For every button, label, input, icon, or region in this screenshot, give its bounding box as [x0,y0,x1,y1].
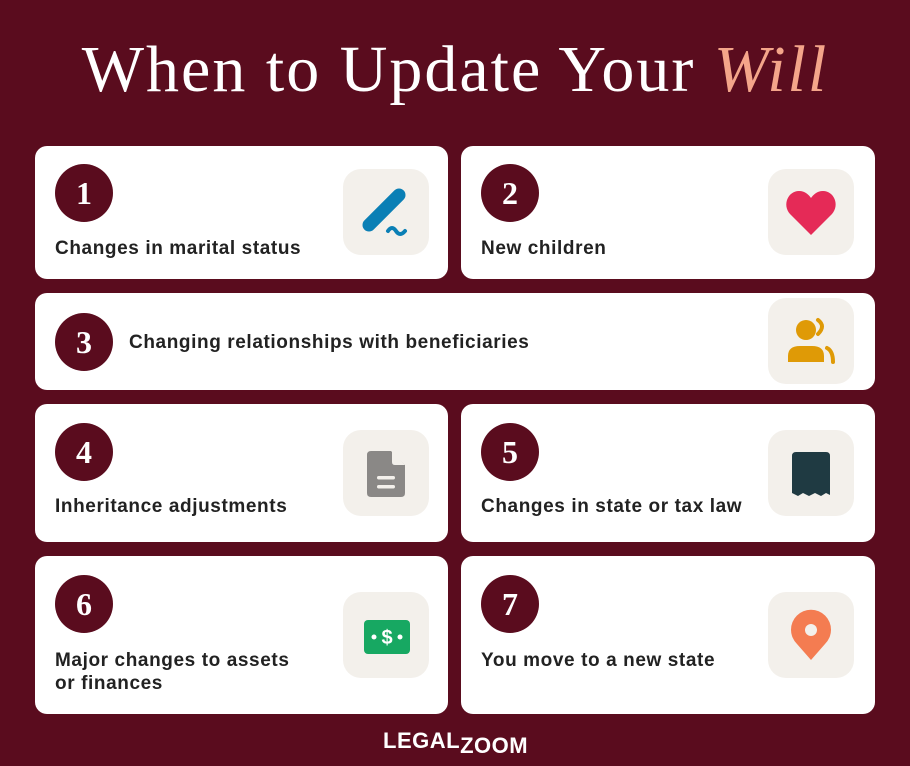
text 5: Changes in state or tax law [481,496,742,517]
panel: 4 [35,404,448,542]
number 2: 2 [502,175,518,211]
text 6: Major changes to assets [55,650,290,671]
panel: 7 [461,556,875,714]
number 3 [55,313,113,371]
icon: pin [768,592,854,678]
number 1: 1 [76,175,92,211]
number 1 [55,164,113,222]
icon: people [768,298,854,384]
panel: 6 [35,556,448,714]
number 7: 7 [502,586,518,622]
icon: pen [343,169,429,255]
number 6: 6 [76,586,92,622]
text 6 [55,650,290,694]
panel: 3 [35,293,875,390]
text 2: New children [481,238,606,259]
panel: 2 [461,146,875,279]
number 4 [55,423,113,481]
panel: 5 [461,404,875,542]
number 5: 5 [502,434,518,470]
number 5 [481,423,539,481]
icon: money [343,592,429,678]
title: When to Update Your Will [82,33,828,106]
text 6: or finances [55,673,163,694]
number 3: 3 [76,324,92,360]
text 1: Changes in marital status [55,238,301,259]
text 7: You move to a new state [481,650,715,671]
logo: LEGALZOOM [383,728,528,758]
icon: receipt [768,430,854,516]
icon: heart [768,169,854,255]
number 4: 4 [76,434,92,470]
number 7 [481,575,539,633]
text 4: Inheritance adjustments [55,496,287,517]
icon: money: $ [381,627,393,649]
text 3: Changing relationships with beneficiaries [129,332,529,353]
number 6 [55,575,113,633]
icon: document [343,430,429,516]
panel: 1 [35,146,448,279]
number 2 [481,164,539,222]
